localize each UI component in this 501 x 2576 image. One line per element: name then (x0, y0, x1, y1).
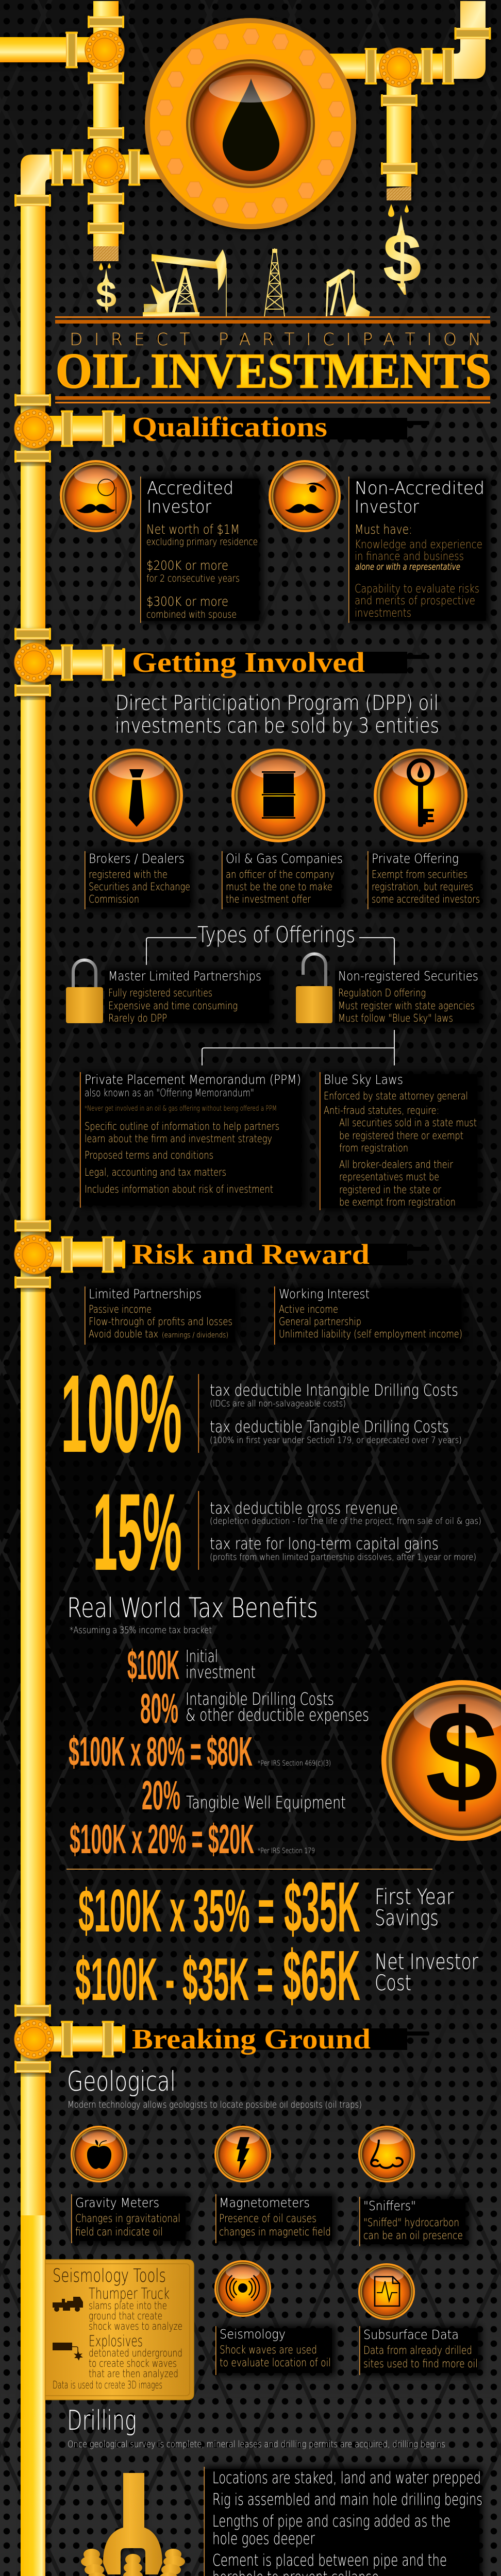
text: thumper truck: shock waves to analyze (89, 2320, 182, 2332)
panel: gravity meters: Changes in gravitational (75, 2212, 180, 2225)
panel: sniffers (359, 2197, 469, 2246)
icon: accredited investor (60, 460, 132, 532)
panel: limited partnerships: Flow-through of profits and losses (89, 1315, 232, 1328)
panel: PPM: Includes information about risk of investment (85, 1183, 273, 1195)
connector (202, 1030, 394, 1065)
calc: first year savings: $100K x 35% = (78, 1877, 274, 1944)
panel: PPM: learn about the firm and investment strategy (85, 1132, 272, 1145)
panel: blue sky laws: Enforced by state attorney general (324, 1090, 468, 1102)
text block: in finance and business (355, 550, 464, 563)
panel: drilling steps (204, 2467, 482, 2576)
panel: oil and gas companies: the investment offer (226, 893, 311, 905)
text block (146, 478, 258, 620)
horizontal pipe top left (0, 37, 93, 62)
text block: excluding primary residence (146, 536, 258, 548)
icon: closed lock (66, 960, 103, 1023)
calc: 80 percent (69, 1685, 369, 1774)
elbow left (21, 155, 52, 206)
panel: subsurface data: sites used to find more oil (363, 2358, 478, 2370)
couplings and valves (14, 15, 491, 234)
panel: PPM: Legal, accounting and tax matters (85, 1166, 226, 1178)
text block: investments (355, 607, 411, 620)
text block: Investor (147, 497, 211, 517)
icon: thumper truck (53, 2297, 83, 2312)
calc: initial investment: Initial (186, 1646, 218, 1666)
panel: master limited partnerships (105, 969, 272, 1025)
panel: master limited partnerships: Master Limited Partnerships (108, 969, 261, 984)
panel: blue sky laws: be registered there or exempt (339, 1129, 463, 1142)
text: explosives: detonated underground (89, 2347, 182, 2359)
panel: brokers: registered with the (89, 868, 168, 880)
horizontal pipe right (327, 54, 446, 79)
panel: magnetometers: Magnetometers (219, 2195, 310, 2210)
icon: explosives (53, 2343, 83, 2361)
panel: drilling steps: hole goes deeper (212, 2530, 315, 2548)
heading: geological: Geological (67, 2066, 176, 2097)
panel: private offering: Exempt from securities (372, 868, 467, 880)
panel: accredited investor (140, 477, 262, 623)
icon: barrel (231, 749, 325, 842)
section header: Getting Involved: Getting Involved (132, 647, 365, 678)
panel: private offering (368, 851, 483, 909)
calc: net investor cost: $100K - $35K = (75, 1945, 273, 2013)
panel: gravity meters (71, 2194, 189, 2243)
panel: gravity meters: field can indicate oil (75, 2226, 163, 2238)
panel: seismology (215, 2326, 335, 2375)
title rules (55, 396, 490, 403)
stat: 100%: tax deductible Tangible Drilling Costs (210, 1418, 449, 1436)
panel: private offering: Private Offering (372, 851, 459, 866)
panel: seismology: Shock waves are used (220, 2344, 317, 2356)
section header: Getting Involved (14, 628, 429, 697)
panel: limited partnerships: Limited Partnerships (89, 1286, 202, 1301)
calc: 20 percent: *Per IRS Section 179 (258, 1847, 315, 1855)
section header: Breaking Ground (14, 2004, 429, 2073)
text: 3d images: Data is used to create 3D images (53, 2379, 162, 2391)
panel: magnetometers: Presence of oil causes (219, 2212, 316, 2225)
text block: Non-Accredited (355, 478, 485, 499)
icon: nose (358, 2126, 415, 2182)
heading: types of offerings: Types of Offerings (197, 922, 355, 948)
icon: oil drop (223, 78, 279, 171)
elbow top right (443, 1, 486, 79)
title: direct participation: DIRECT PARTICIPATION (70, 329, 481, 349)
panel: subsurface data: Data from already drilled (363, 2344, 472, 2357)
stat: 100%: 100% (61, 1351, 182, 1476)
section header: Qualifications (14, 394, 429, 463)
text block: $300K or more (146, 594, 228, 609)
icon: tie (89, 749, 183, 842)
panel: PPM: Specific outline of information to help partners (85, 1120, 279, 1132)
panel: limited partnerships: (earnings / dividends) (162, 1331, 228, 1340)
calc: 80 percent: $100K x 80% = $80K (69, 1728, 253, 1774)
panel: non-registered securities (335, 969, 482, 1025)
panel: limited partnerships: Passive income (89, 1303, 152, 1315)
intro text: investments can be sold by 3 entities (115, 714, 439, 738)
calc: 80 percent: & other deductible expenses (186, 1705, 369, 1725)
panel: non-accredited investor (348, 477, 489, 623)
text block: alone or with a representative (355, 562, 460, 572)
icon: small gold dollar: $ (96, 274, 116, 315)
icon: open lock (296, 954, 332, 1023)
stat: 15%: tax deductible gross revenue (210, 1499, 398, 1518)
heading: geological (67, 2066, 362, 2110)
calc: 20 percent: 20% (142, 1772, 180, 1818)
panel: sniffers: "Sniffed" hydrocarbon (363, 2216, 459, 2229)
icon: seismic waves (214, 2260, 271, 2317)
text block: for 2 consecutive years (146, 573, 240, 584)
panel: oil and gas companies: an officer of the company (226, 868, 335, 880)
text block: combined with spouse (146, 609, 237, 620)
gem: big dollar (381, 1680, 501, 1841)
calc: initial investment: investment (186, 1662, 256, 1682)
icon: pump jack small (326, 269, 370, 316)
panel: blue sky laws: from registration (339, 1142, 408, 1154)
icon: key (374, 749, 467, 842)
panel: blue sky laws: be exempt from registration (339, 1196, 456, 1208)
heading: real world tax benefits: *Assuming a 35% income tax bracket (70, 1625, 212, 1636)
panel: master limited partnerships: Expensive and time consuming (108, 999, 238, 1012)
panel: non-registered securities: Regulation D offering (338, 987, 426, 999)
section header: Risk and Reward: Risk and Reward (132, 1239, 370, 1270)
text: explosives: that are then analyzed (89, 2367, 178, 2380)
heading: real world tax benefits: Real World Tax Benefits (67, 1592, 318, 1624)
panel: blue sky laws: Anti-fraud statutes, require: (324, 1104, 439, 1116)
panel: private offering: registration, but requires (372, 880, 473, 893)
panel: blue sky laws (320, 1072, 480, 1210)
calc: initial investment: $100K (127, 1642, 179, 1688)
text block: and merits of prospective (355, 595, 475, 607)
panel: master limited partnerships: Fully registered securities (108, 987, 212, 999)
intro text: Direct Participation Program (DPP) oil (115, 691, 439, 715)
section header: Risk and Reward (14, 1220, 429, 1289)
panel: magnetometers (215, 2194, 335, 2243)
text: thumper truck: slams plate into the (89, 2299, 167, 2312)
calc: 80 percent: Intangible Drilling Costs (186, 1689, 334, 1709)
text: thumper truck: ground that create (89, 2310, 162, 2322)
stat: 15% (93, 1471, 481, 1594)
panel: PPM: also known as an "Offering Memorandum" (85, 1087, 254, 1099)
panel: PPM: Proposed terms and conditions (85, 1149, 213, 1161)
section header: Qualifications: Qualifications (132, 411, 327, 443)
icon: lightning (214, 2126, 271, 2182)
panel: working interest: Active income (279, 1303, 338, 1315)
panel: sniffers: can be an oil presence (363, 2229, 463, 2242)
bracket: offerings (146, 938, 394, 965)
icon: drill bit (81, 2473, 185, 2576)
icon: big gold dollar: $ (383, 220, 422, 297)
calc: first year savings: First Year (375, 1884, 454, 1909)
text: thumper truck (89, 2285, 182, 2332)
panel: seismology: Seismology (220, 2327, 286, 2342)
panel: limited partnerships (85, 1286, 238, 1345)
main vertical pipe (21, 170, 45, 2576)
text: explosives: to create shock waves (89, 2357, 177, 2369)
text: explosives: Explosives (89, 2332, 143, 2350)
panel: oil and gas companies (222, 851, 344, 909)
stat: 15%: 15% (93, 1471, 182, 1594)
panel: seismology: to evaluate location of oil (220, 2357, 331, 2369)
panel: seismology tools (45, 2260, 194, 2400)
heading: drilling: Drilling (67, 2405, 137, 2436)
icon: apple (71, 2126, 127, 2182)
panel: subsurface data (359, 2326, 481, 2375)
heading: Seismology Tools (53, 2265, 166, 2286)
pipe drips (99, 204, 409, 270)
stat: 100%: (IDCs are all non-salvageable costs) (210, 1399, 346, 1409)
panel: non-registered securities: Must follow "Blue Sky" laws (338, 1012, 453, 1024)
text block: $200K or more (146, 558, 228, 573)
panel: working interest: Working Interest (279, 1286, 370, 1301)
panel: PPM (80, 1072, 305, 1208)
text: explosives (89, 2332, 182, 2380)
calc: 20 percent: $100K x 20% = $20K (70, 1816, 254, 1862)
panel: blue sky laws: Blue Sky Laws (324, 1072, 403, 1087)
text block: Must have: (355, 522, 412, 537)
panel: brokers: Securities and Exchange (89, 880, 190, 893)
panel: PPM: *Never get involved in an oil & gas offering without being offered a PPM (85, 1105, 277, 1113)
panel: magnetometers: changes in magnetic field (219, 2226, 331, 2238)
stat: 100%: (100% in first year under Section 179, or deprecated over 7 years) (210, 1435, 462, 1446)
big central flange (145, 18, 356, 229)
panel: brokers: Brokers / Dealers (89, 851, 185, 866)
panel: non-registered securities: Non-registered Securities (338, 969, 478, 984)
text block (355, 478, 485, 620)
panel: gravity meters: Gravity Meters (75, 2195, 159, 2210)
text: thumper truck: Thumper Truck (89, 2285, 170, 2302)
heading: real world tax benefits (67, 1592, 318, 1636)
icon: pump jack large (143, 249, 227, 316)
ground lines top (55, 316, 490, 324)
icon: non-accredited investor (269, 460, 341, 532)
heading: geological: Modern technology allows geologists to locate possible oil deposits (oil traps) (68, 2099, 362, 2110)
text block: Net worth of $1M (146, 522, 240, 537)
icon: derrick (264, 248, 285, 316)
calc: first year savings: $35K (284, 1868, 360, 1947)
calc: first year savings: Savings (375, 1905, 439, 1930)
calc: 20 percent: Tangible Well Equipment (186, 1792, 346, 1812)
panel: limited partnerships: Avoid double tax (89, 1328, 158, 1340)
panel: blue sky laws: registered in the state or (339, 1183, 442, 1196)
panel: oil and gas companies: must be the one to make (226, 880, 332, 893)
panel: sniffers: "Sniffers" (363, 2198, 416, 2213)
horizontal pipe mid left (49, 155, 163, 179)
text block: Accredited (147, 478, 233, 499)
section header: Breaking Ground: Breaking Ground (132, 2023, 371, 2055)
calc: 80 percent: 80% (140, 1685, 178, 1732)
calc: net investor cost: $65K (283, 1936, 360, 2015)
panel: blue sky laws: All broker-dealers and their (339, 1158, 454, 1171)
panel: working interest: General partnership (279, 1315, 361, 1328)
panel: brokers (85, 851, 193, 909)
heading: drilling (67, 2405, 445, 2450)
calc: 80 percent: *Per IRS Section 469(c)(3) (258, 1759, 331, 1768)
calc: net investor cost: Cost (375, 1970, 411, 1995)
gem: big dollar: $ (425, 1683, 498, 1830)
intro text (115, 691, 439, 738)
text block: Investor (355, 497, 419, 517)
panel: blue sky laws: representatives must be (339, 1171, 439, 1183)
panel: oil and gas companies: Oil & Gas Companies (226, 851, 343, 866)
calc: 20 percent (70, 1772, 346, 1862)
vertical pipe top left (93, 1, 119, 261)
stat: 15%: tax rate for long-term capital gains (210, 1535, 439, 1553)
panel: master limited partnerships: Rarely do DPP (108, 1012, 167, 1024)
icon: data document (358, 2263, 415, 2320)
vertical pipe right (387, 77, 411, 200)
panel: brokers: Commission (89, 893, 139, 905)
panel: subsurface data: Subsurface Data (363, 2327, 459, 2342)
panel: working interest (274, 1286, 464, 1345)
panel: PPM: Private Placement Memorandum (PPM) (85, 1072, 301, 1087)
